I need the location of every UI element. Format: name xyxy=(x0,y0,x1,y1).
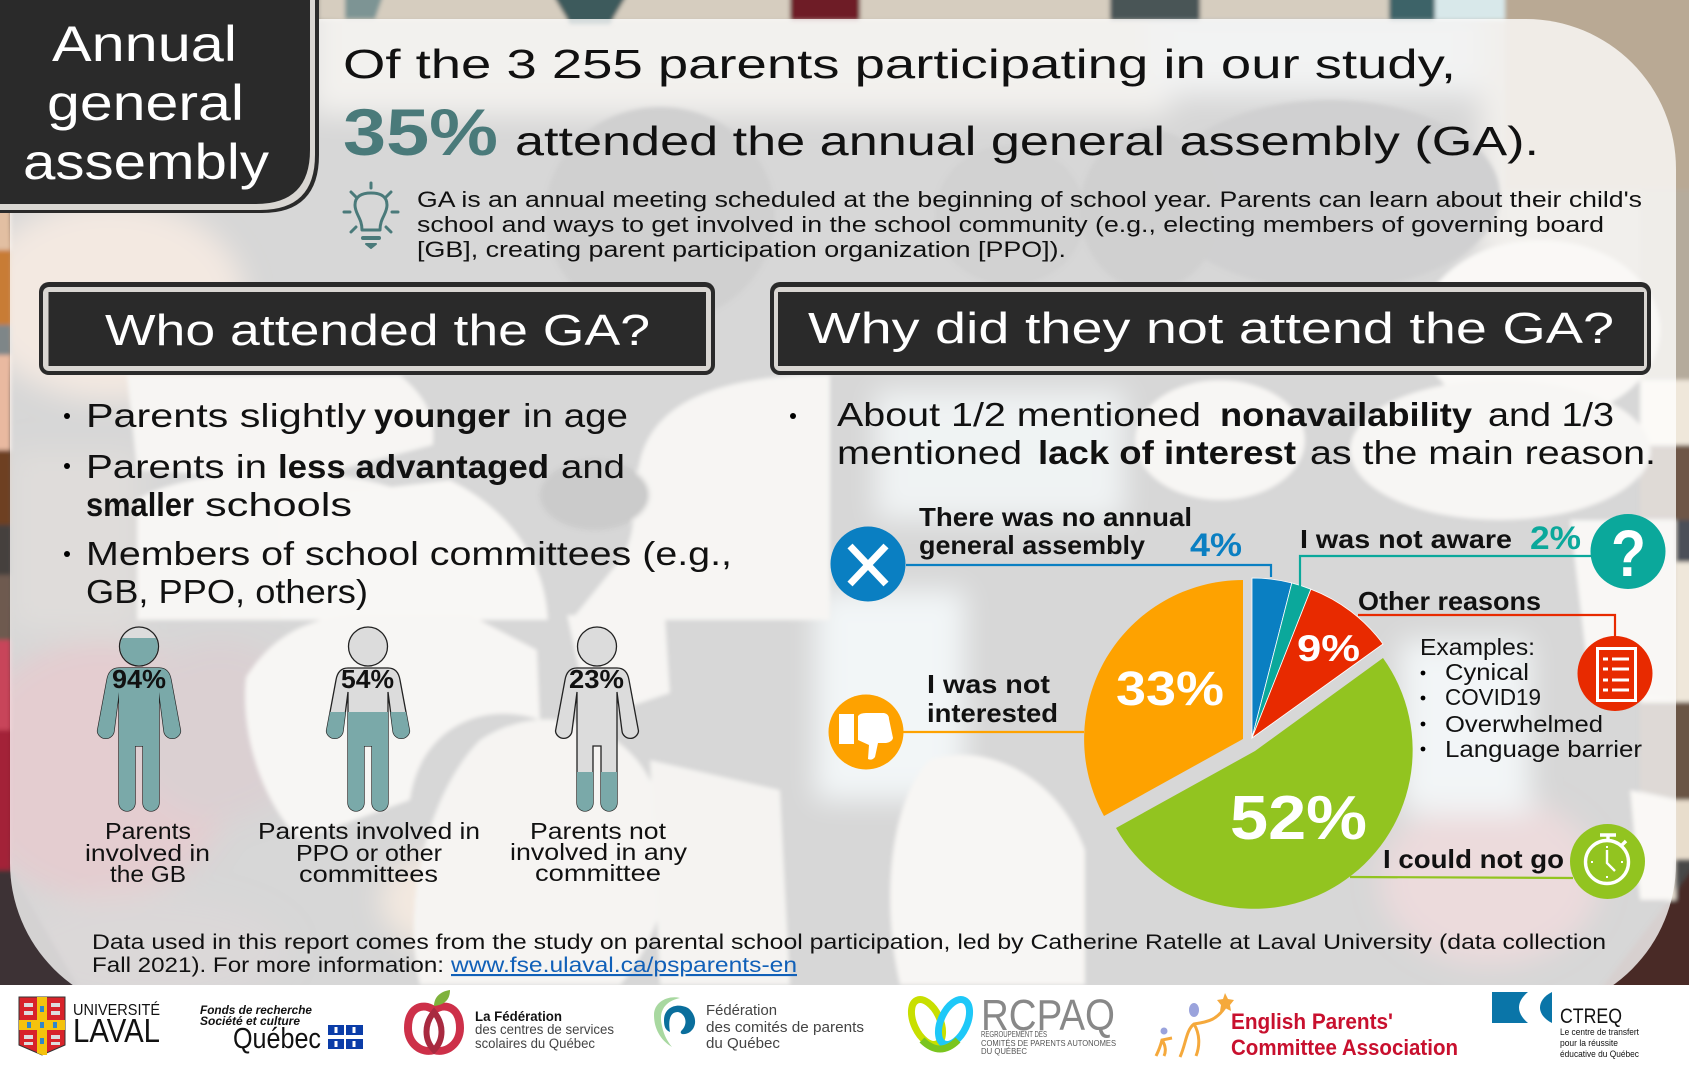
logo: CTREQ: pour la réussite xyxy=(1560,1038,1618,1049)
logo: Fédération des comités de parents: du Québec xyxy=(706,1036,780,1052)
logo: English Parents' Committee Association xyxy=(1156,993,1458,1060)
callout: not interested: I was not xyxy=(927,669,1050,699)
callout: not aware: I was not aware xyxy=(1300,524,1512,554)
logo: RCPAQ: REGROUPEMENT DES xyxy=(981,1030,1047,1039)
wood pieces in left column xyxy=(127,375,433,480)
bullet list: who attended: GB, PPO, others) xyxy=(86,573,368,610)
outer strip colours xyxy=(319,0,1390,20)
bullet list: who attended: in age xyxy=(523,397,628,434)
pictogram: governing board 94% xyxy=(98,627,180,811)
value 9%: 9% xyxy=(1297,628,1360,669)
logo: La Fédération des centres de services scolaires: des centres de services xyxy=(475,1022,614,1037)
bullet list: who attended: and xyxy=(561,448,625,485)
logo: CTREQ xyxy=(1492,992,1639,1060)
logo: English Parents' Committee Association: English Parents' xyxy=(1231,1009,1393,1034)
logo: La Fédération des centres de services scolaires xyxy=(408,990,614,1051)
logo: RCPAQ: RCPAQ xyxy=(981,991,1115,1040)
headline xyxy=(343,41,1539,169)
caption: governing board: the GB xyxy=(110,861,186,887)
logo: CTREQ: Le centre de transfert xyxy=(1560,1027,1639,1038)
logo: CTREQ: éducative du Québec xyxy=(1560,1049,1639,1060)
bullet list: who attended: schools xyxy=(205,486,352,523)
bullet: why not attend: mentioned xyxy=(837,434,1022,471)
pie chart of reasons xyxy=(1084,578,1413,909)
callout: no assembly: general assembly xyxy=(919,530,1146,560)
source note: Data used in this report comes from the study on parental school participation, led by Catherine Ratelle at Laval University (data collection xyxy=(92,931,1606,954)
caption: governing board: involved in xyxy=(85,840,210,866)
callout: not aware xyxy=(1300,514,1666,590)
text block: GA definition: school and ways to get involved in the school community (e.g., electing members of governing board xyxy=(417,212,1604,237)
callout: no assembly: There was no annual xyxy=(919,502,1192,532)
slice: could not go 52% xyxy=(1116,658,1413,909)
pictogram: governing board 94%: 94% xyxy=(112,664,166,694)
pictogram: PPO or other committees 54% xyxy=(326,627,410,811)
bullet: why not attend: as the main reason. xyxy=(1310,434,1656,471)
callout: not aware: 2% xyxy=(1530,520,1581,556)
caption: other committees: Parents involved in xyxy=(258,818,480,844)
headline: Of the 3 255 parents participating in our study, xyxy=(343,41,1456,87)
logo: Fonds de recherche Québec xyxy=(200,1005,363,1055)
bullet: why not attend: nonavailability xyxy=(1220,396,1473,433)
slice: not interested 33% xyxy=(1084,580,1243,816)
pictogram: PPO or other committees 54%: 54% xyxy=(341,664,394,694)
logo: Fédération des comités de parents xyxy=(654,997,864,1052)
callout: other reasons: Other reasons xyxy=(1358,586,1541,616)
logo: Fédération des comités de parents: des comités de parents xyxy=(706,1020,864,1036)
logo: RCPAQ xyxy=(905,991,1116,1056)
pictogram: no committee 23% xyxy=(556,627,638,811)
logo: Fonds de recherche Québec: Fonds de recherche xyxy=(200,1005,313,1017)
callout: not interested xyxy=(828,669,1084,770)
footer white band xyxy=(0,985,1689,1077)
callout: could not go xyxy=(1350,824,1645,899)
logo: La Fédération des centres de services scolaires: scolaires du Québec xyxy=(475,1036,595,1051)
callout: not aware: ? xyxy=(1611,516,1646,590)
source note: Fall 2021). For more information: xyxy=(92,954,444,977)
bullet: why not attend: lack of interest xyxy=(1038,434,1296,471)
value 52%: 52% xyxy=(1230,784,1367,853)
heading: why not attend xyxy=(770,282,1651,375)
list: examples of other reasons: Overwhelmed xyxy=(1445,711,1603,737)
title block: Annual xyxy=(52,16,237,72)
caption: governing board xyxy=(85,818,210,887)
caption: no committee xyxy=(510,818,688,886)
heading: who attended xyxy=(39,282,715,375)
icon: light bulb xyxy=(344,183,398,248)
slice: other reasons 9% xyxy=(1252,589,1383,738)
caption: other committees: PPO or other xyxy=(296,840,442,866)
bullet list: who attended: Parents in xyxy=(86,448,267,485)
text block: GA definition xyxy=(417,187,1642,262)
callout: not interested: interested xyxy=(927,698,1058,728)
callout: no assembly: 4% xyxy=(1190,527,1242,563)
list: examples of other reasons xyxy=(1420,634,1642,762)
key figure 35%: 35% xyxy=(343,95,498,169)
caption: governing board: Parents xyxy=(105,818,191,844)
logo: RCPAQ: COMITÉS DE PARENTS AUTONOMES xyxy=(981,1039,1116,1048)
bullet list: who attended: less advantaged xyxy=(278,448,549,485)
pictogram: no committee 23%: 23% xyxy=(569,664,624,694)
bullet list: who attended: Parents slightly xyxy=(86,397,367,434)
list: examples of other reasons: Cynical xyxy=(1445,659,1529,685)
slice: not aware 2% xyxy=(1252,583,1311,738)
bullet: why not attend: About 1/2 mentioned xyxy=(837,396,1201,433)
logo: Université Laval: UNIVERSITÉ xyxy=(73,1000,160,1019)
text block: GA definition: GA is an annual meeting scheduled at the beginning of school year. Parents can learn about their child's xyxy=(417,187,1642,212)
source note xyxy=(92,931,1606,977)
title block: general xyxy=(47,75,244,131)
title block xyxy=(0,0,319,213)
heading: who attended: Who attended the GA? xyxy=(105,306,650,355)
callout: other reasons xyxy=(1358,586,1652,711)
list: examples of other reasons: Examples: xyxy=(1420,634,1535,660)
logo: RCPAQ: DU QUÉBEC xyxy=(981,1047,1027,1056)
dark discs behind the intro xyxy=(545,107,775,323)
source note: www.fse.ulaval.ca/psparents-en xyxy=(450,954,797,977)
caption: no committee: involved in any xyxy=(510,839,688,865)
logo: Université Laval xyxy=(19,997,160,1055)
logo: Fonds de recherche Québec: Société et culture xyxy=(200,1016,301,1028)
bullet list: who attended: younger xyxy=(374,397,510,434)
value 33%: 33% xyxy=(1116,663,1224,716)
logo: La Fédération des centres de services scolaires: La Fédération xyxy=(475,1009,562,1024)
caption: other committees: committees xyxy=(299,861,438,887)
logo: English Parents' Committee Association: Committee Association xyxy=(1231,1035,1458,1060)
list: examples of other reasons: Language barrier xyxy=(1445,736,1642,762)
headline: attended the annual general assembly (GA). xyxy=(515,118,1539,164)
text block: GA definition: [GB], creating parent participation organization [PPO]). xyxy=(417,237,1066,262)
list: examples of other reasons: COVID19 xyxy=(1445,684,1541,710)
heading: why not attend: Why did they not attend the GA? xyxy=(808,304,1614,353)
caption: no committee: committee xyxy=(535,860,661,886)
slice: no assembly 4% xyxy=(1252,578,1292,738)
bullet list: who attended: smaller xyxy=(86,486,194,523)
logo: Fonds de recherche Québec: Québec xyxy=(233,1023,321,1055)
logo: Université Laval: LAVAL xyxy=(73,1012,160,1049)
bullet: why not attend xyxy=(790,396,1656,471)
logo: Fédération des comités de parents: Fédération xyxy=(706,1003,777,1019)
callout: no assembly xyxy=(830,502,1271,602)
wood pieces in right column xyxy=(750,395,830,485)
caption: other committees xyxy=(258,818,480,887)
title block: assembly xyxy=(23,134,269,190)
bullet: why not attend: and 1/3 xyxy=(1488,396,1614,433)
bullet list: who attended xyxy=(64,397,732,610)
logo: CTREQ: CTREQ xyxy=(1560,1005,1622,1028)
callout: could not go: I could not go xyxy=(1383,844,1564,874)
bullet list: who attended: Members of school committees (e.g., xyxy=(86,535,732,572)
caption: no committee: Parents not xyxy=(530,818,667,844)
